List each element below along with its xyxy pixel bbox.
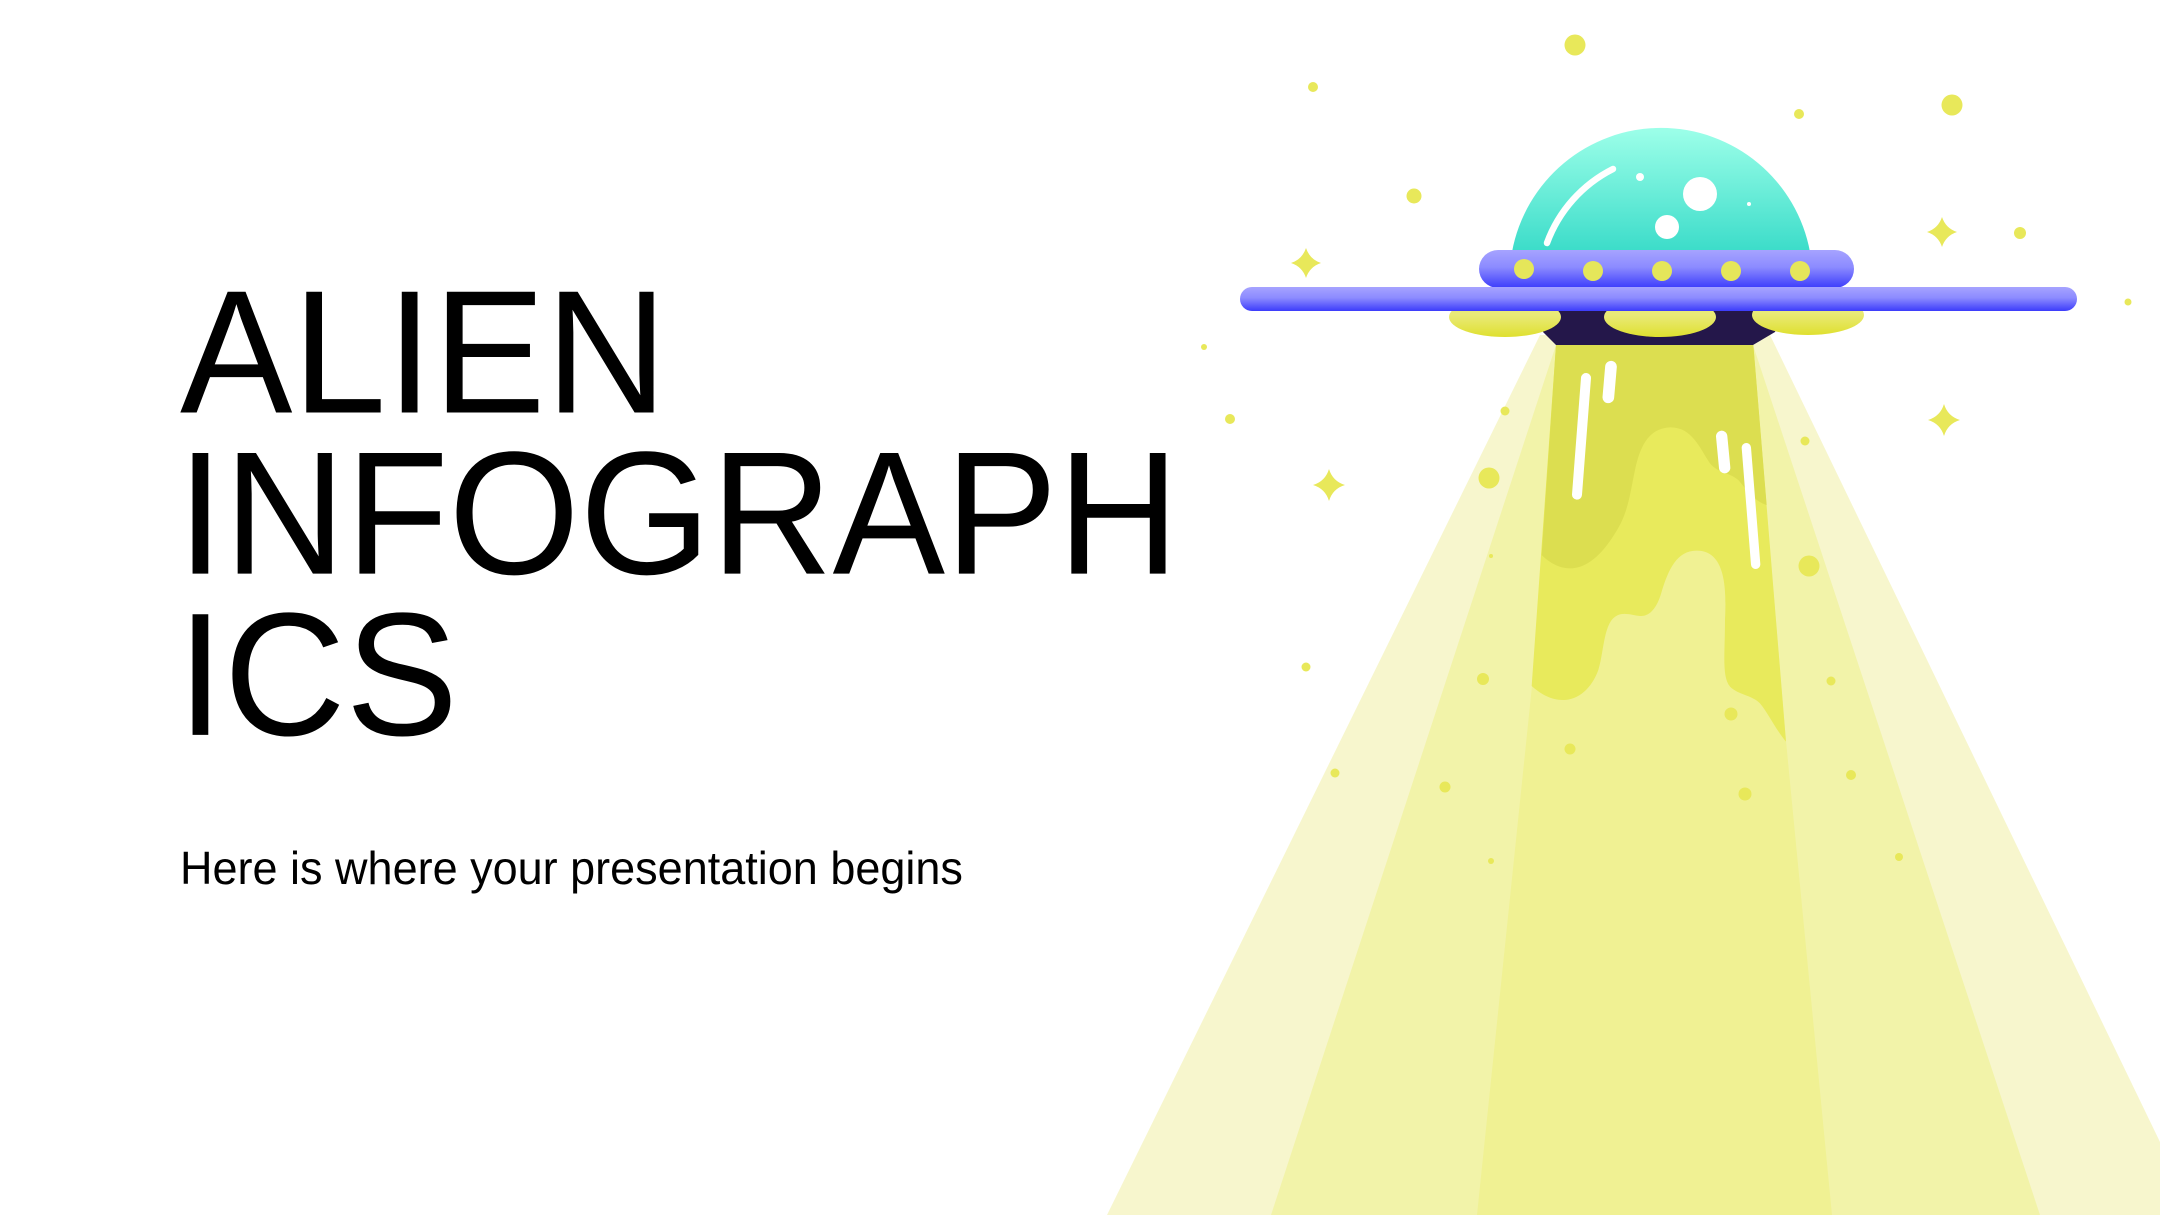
UFO — [1240, 128, 2077, 345]
beam: middle layer — [1271, 345, 2040, 1215]
subtitle: Here is where your presentation begins — [180, 841, 963, 894]
title: ALIEN — [180, 253, 667, 450]
slime: dark layer — [1542, 345, 1767, 568]
UFO: glass dome — [1512, 128, 1810, 252]
beam: outer layer — [1107, 335, 2160, 1215]
UFO: ring lights — [1514, 259, 1810, 281]
UFO: saucer bar — [1240, 287, 2077, 311]
beam: white streaks — [1577, 367, 1756, 564]
UFO: dark underside — [1536, 311, 1784, 345]
title — [177, 253, 1179, 772]
beam: inner layer — [1477, 345, 1832, 1215]
UFO: right lamp — [1752, 295, 1864, 335]
title: ICS — [177, 576, 458, 772]
UFO: centre lamp — [1604, 297, 1716, 337]
UFO: left lamp — [1449, 297, 1561, 337]
UFO: upper ring — [1479, 250, 1854, 288]
stars and dots — [1201, 34, 2132, 864]
UFO: dome highlights — [1547, 169, 1751, 243]
title: INFOGRAPH — [177, 415, 1179, 611]
slime: bright layer — [1532, 345, 1786, 742]
beam: slime drips — [1532, 345, 1786, 742]
